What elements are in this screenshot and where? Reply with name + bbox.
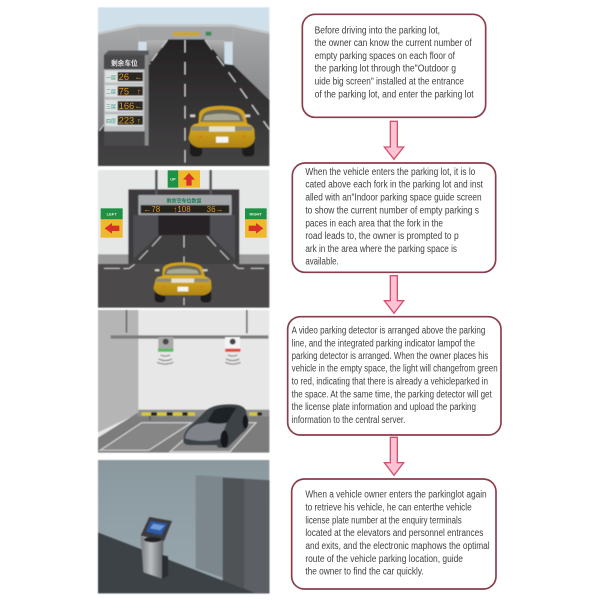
sign: remaining spaces: ↑	[137, 116, 141, 125]
text box: enquiry terminal: license plate number at the enquiry terminals	[305, 515, 462, 526]
icon: enquiry kiosk	[141, 517, 172, 579]
sign: remaining spaces: 26	[119, 72, 129, 82]
arrow: step 3 to 4	[384, 437, 404, 475]
text box: video parking detector	[288, 317, 501, 435]
sign: remaining spaces: ←	[135, 73, 143, 82]
text box: video parking detector: the space. At the same time, the parking detector will get	[292, 389, 492, 400]
sign: left direction: LEFT	[107, 211, 117, 216]
display: remaining spaces by direction: 剩余空车位数量	[167, 198, 201, 205]
panel: enquiry terminal scene	[98, 460, 269, 593]
sign: remaining spaces: 三层	[106, 104, 116, 110]
text box: outdoor guide screen: uide big screen" installed at the entrance	[315, 76, 464, 87]
text box: outdoor guide screen	[302, 14, 486, 117]
text box: indoor guide screen: alled with an"Indoor parking space guide screen	[305, 193, 482, 204]
sign: up direction: UP	[170, 177, 176, 182]
text box: indoor guide screen: available.	[305, 257, 339, 268]
display: remaining spaces by direction	[143, 198, 224, 214]
display: remaining spaces by direction: ↑108	[173, 205, 191, 214]
sign: remaining spaces: 二层	[106, 90, 116, 96]
sign: remaining spaces: ←	[135, 102, 143, 111]
text box: video parking detector: parking detector is arranged. When the owner places his	[292, 351, 488, 362]
text box: indoor guide screen: ark in the area where the parking space is	[305, 244, 457, 255]
panel: indoor guide screen scene	[98, 170, 269, 308]
text box: video parking detector: line, and the integrated parking indicator lampof the	[292, 338, 475, 349]
text box: enquiry terminal: and exits, and the electronic maphows the optimal	[305, 541, 490, 552]
text box: video parking detector: A video parking detector is arranged above the parking	[292, 325, 485, 336]
sign: up direction	[168, 170, 200, 188]
text box: enquiry terminal: When a vehicle owner enters the parkinglot again	[305, 490, 487, 501]
text box: indoor guide screen: When the vehicle enters the parking lot, it is lo	[305, 167, 476, 178]
text box: indoor guide screen	[292, 163, 496, 272]
sign: remaining spaces: 一层	[106, 75, 116, 81]
text box: video parking detector: to red, indicating that there is already a vehicleparked in	[292, 377, 488, 388]
sign: right direction	[245, 208, 267, 238]
text box: indoor guide screen: to show the current number of empty parking s	[305, 205, 479, 216]
sign: right direction: RIGHT	[249, 211, 262, 216]
sign: remaining spaces: 75	[119, 86, 129, 96]
text box: outdoor guide screen: of the parking lot, and enter the parking lot	[315, 89, 474, 100]
sign: remaining spaces: 166	[119, 101, 134, 111]
car: dark grey sedan	[183, 404, 248, 448]
text box: enquiry terminal: to retrieve his vehicle, he can enterthe vehicle	[305, 503, 472, 514]
icon: detector with green light	[157, 337, 173, 364]
sign: left direction	[101, 208, 123, 238]
text box: indoor guide screen: cated above each fork in the parking lot and inst	[305, 180, 483, 191]
sign: remaining spaces	[104, 51, 149, 146]
text box: video parking detector: information to the central server.	[292, 415, 405, 426]
text box: enquiry terminal: the owner to find the car quickly.	[305, 567, 424, 578]
display: remaining spaces by direction: 36→	[207, 205, 224, 214]
text box: enquiry terminal: located at the elevators and personnel entrances	[305, 528, 483, 539]
display: remaining spaces by direction: ←78	[143, 205, 161, 214]
car: yellow sports car rear	[153, 262, 212, 302]
car: yellow sports car rear	[188, 106, 255, 156]
panel: video parking detector scene	[98, 310, 269, 453]
sign: remaining spaces: 四层	[106, 119, 116, 125]
icon: detector with red light	[225, 337, 241, 364]
arrow: step 1 to 2	[384, 121, 404, 159]
text box: outdoor guide screen: the owner can know the current number of	[315, 38, 472, 49]
sign: remaining spaces: ↑	[137, 87, 141, 96]
sign: remaining spaces: 223	[119, 116, 134, 126]
sign: remaining spaces: 剩余车位	[111, 58, 138, 67]
arrow: step 2 to 3	[384, 276, 404, 313]
text box: indoor guide screen: road leads to, the owner is prompted to p	[305, 231, 459, 242]
text box: enquiry terminal	[292, 479, 496, 589]
text box: outdoor guide screen: Before driving into the parking lot,	[315, 25, 440, 36]
panel: outdoor guide screen scene	[98, 7, 269, 166]
text box: video parking detector: vehicle in the empty space, the light will changefrom green	[292, 364, 498, 375]
text box: outdoor guide screen: the parking lot through the"Outdoor g	[315, 64, 456, 75]
text box: indoor guide screen: paces in each area that the fork in the	[305, 218, 443, 229]
text box: enquiry terminal: route of the vehicle parking location, guide	[305, 554, 463, 565]
text box: outdoor guide screen: empty parking spaces on each floor of	[315, 51, 455, 62]
text box: video parking detector: the license plate information and upload the parking	[292, 402, 476, 413]
